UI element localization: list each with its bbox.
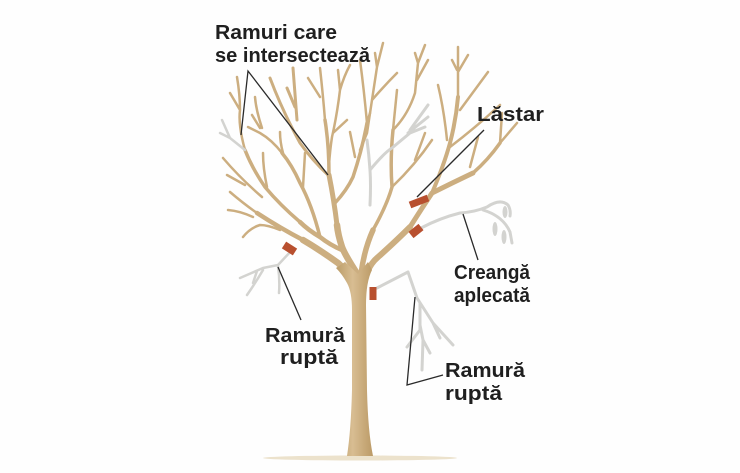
tree: healthy branches [223,43,517,280]
ground [263,456,457,460]
removed branches: grey [220,105,512,370]
left limbs [223,77,352,280]
centre-left leader [270,60,370,275]
tree trunk [336,262,373,456]
pruning cuts: red marks [284,198,428,300]
label: drooping branch: aplecată [454,284,531,307]
grey drooping branch [421,202,512,243]
grey water sprout [367,105,428,205]
label: drooping branch: Creangă [454,261,531,284]
label: water sprout: Lăstar [477,103,544,126]
leader lines [241,71,484,385]
centre-right leader [360,43,432,274]
label: broken branch right: ruptă [445,382,503,405]
label: crossing branches: Ramuri care [215,21,337,44]
label: broken branch left: Ramură [265,324,346,347]
right limb [367,47,517,272]
drooping branch leaves [492,206,508,244]
grey broken branch right [377,272,453,370]
grey broken branch left [240,250,292,295]
grey crossing branch tip [220,120,245,150]
label: crossing branches: se intersectează [215,44,371,67]
label: broken branch right: Ramură [445,359,526,382]
label: broken branch left: ruptă [280,346,339,369]
